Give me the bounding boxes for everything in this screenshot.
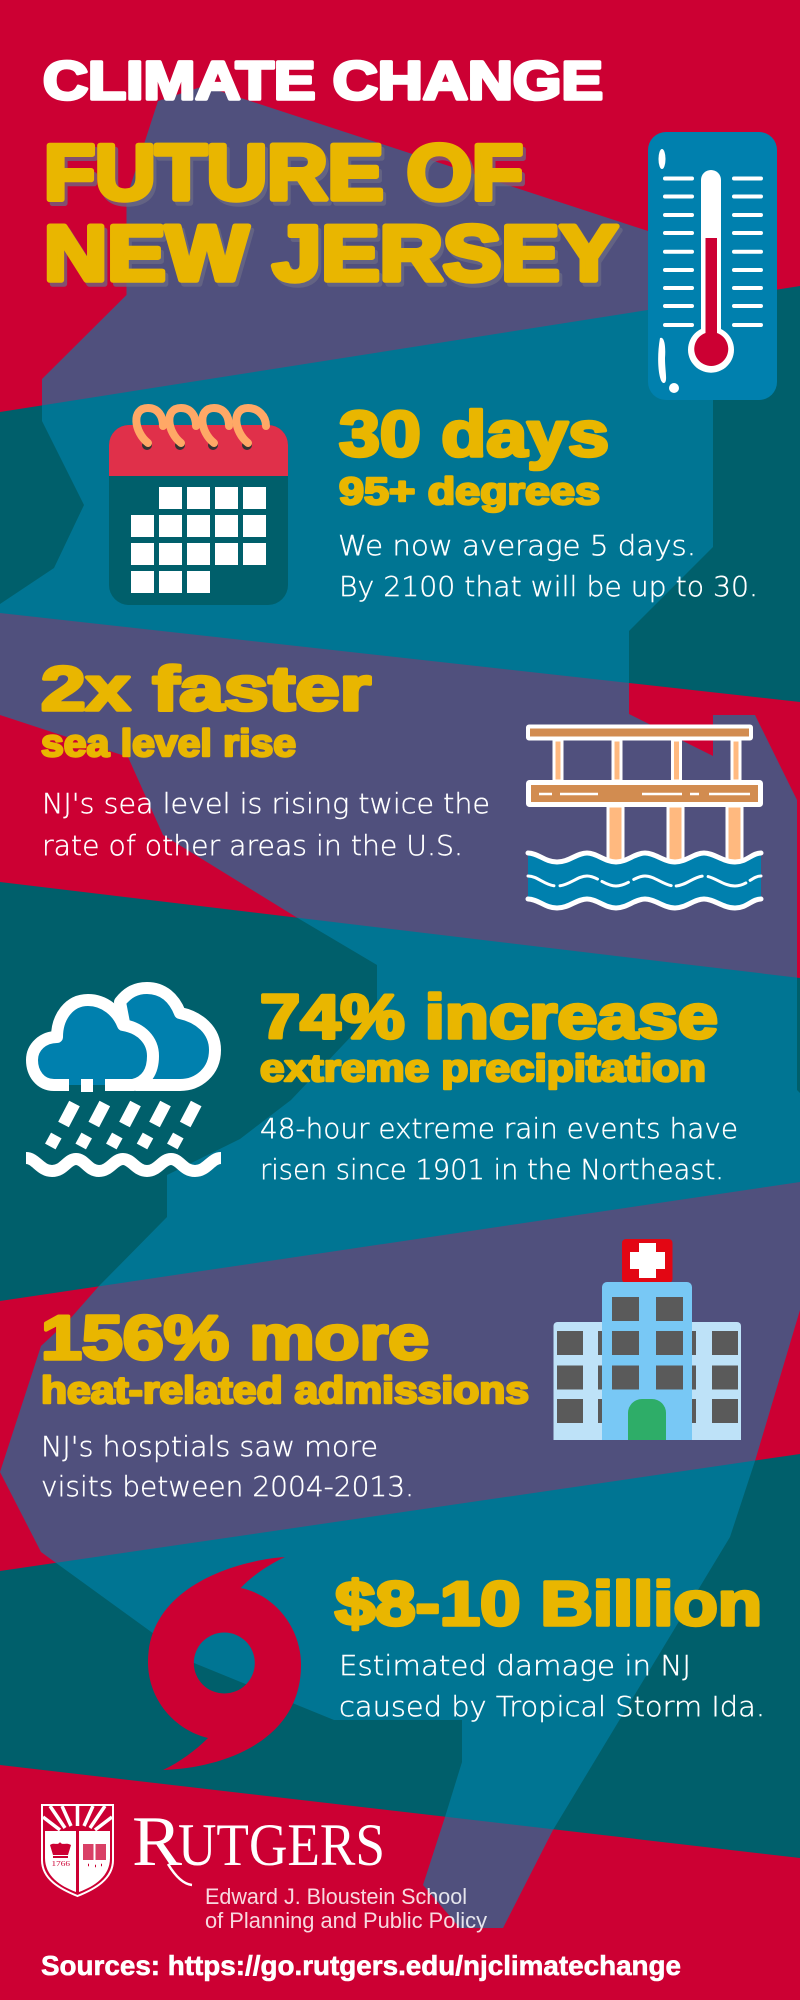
stat label: 95+ degrees: 95+ degrees bbox=[339, 471, 600, 513]
section: heat admissions bbox=[41, 1239, 741, 1503]
stat label: sea level rise: sea level rise bbox=[41, 723, 296, 765]
description: storm damage: Estimated damage in NJ bbox=[339, 1649, 691, 1682]
description: heat admissions: NJ's hosptials saw more bbox=[41, 1430, 378, 1463]
stat: 30 days: 30 days bbox=[339, 398, 609, 470]
icon: Rutgers shield bbox=[42, 1805, 113, 1896]
stat: 156% more: 156% more bbox=[41, 1304, 429, 1373]
stat label: extreme precipitation: extreme precipitation bbox=[260, 1048, 706, 1090]
school name: Edward J. Bloustein School bbox=[205, 1884, 467, 1909]
description: sea level: NJ's sea level is rising twice the bbox=[42, 787, 490, 820]
icon: pier over water bbox=[528, 726, 761, 908]
section: 30 days bbox=[109, 398, 758, 605]
title line: new jersey: NEW JERSEY bbox=[44, 209, 618, 297]
stat: 74% increase: 74% increase bbox=[260, 983, 718, 1052]
stat: 2x faster: 2x faster bbox=[41, 655, 371, 724]
wordmark: Rutgers: R bbox=[132, 1803, 183, 1881]
description: heat admissions: visits between 2004-2013. bbox=[41, 1470, 414, 1503]
title line: climate change: CLIMATE CHANGE bbox=[43, 51, 603, 111]
description: precipitation: 48-hour extreme rain events have bbox=[260, 1112, 738, 1145]
description: heat admissions bbox=[41, 1430, 414, 1503]
icon: calendar bbox=[109, 408, 288, 605]
icon: rain clouds bbox=[26, 988, 221, 1171]
section: sea level bbox=[41, 655, 761, 908]
wordmark: Rutgers: UTGERS bbox=[178, 1812, 385, 1878]
title bbox=[43, 51, 621, 301]
description: sea level: rate of other areas in the U.S. bbox=[42, 829, 463, 862]
school name bbox=[205, 1884, 487, 1933]
description: precipitation: risen since 1901 in the Northeast. bbox=[260, 1153, 724, 1186]
description: 30 days: We now average 5 days. bbox=[338, 529, 696, 562]
wordmark: Rutgers bbox=[132, 1803, 385, 1885]
sources line: Sources: https://go.rutgers.edu/njclimatechange bbox=[41, 1950, 681, 1981]
icon: thermometer bbox=[648, 132, 777, 400]
description: 30 days: By 2100 that will be up to 30. bbox=[339, 570, 758, 603]
description: precipitation bbox=[260, 1112, 738, 1186]
section: precipitation bbox=[26, 983, 738, 1186]
stat label: heat-related admissions: heat-related admissions bbox=[41, 1370, 529, 1412]
icon: Rutgers shield: 1766 bbox=[52, 1859, 70, 1868]
title line: future of: FUTURE OF bbox=[44, 128, 523, 216]
logo: Rutgers bbox=[42, 1803, 487, 1933]
section: storm damage bbox=[148, 1557, 765, 1770]
stat: damage amount: $8-10 Billion bbox=[335, 1570, 762, 1639]
title line: new jersey: NEW JERSEY bbox=[47, 213, 621, 301]
description: storm damage bbox=[339, 1649, 765, 1723]
description: sea level bbox=[42, 787, 490, 862]
description: storm damage: caused by Tropical Storm Ida. bbox=[339, 1690, 765, 1723]
school name: of Planning and Public Policy bbox=[205, 1908, 487, 1933]
title line: future of: FUTURE OF bbox=[47, 132, 526, 220]
icon: hospital bbox=[554, 1239, 741, 1440]
icon: hurricane symbol bbox=[148, 1557, 301, 1770]
description: 30 days bbox=[338, 529, 758, 603]
